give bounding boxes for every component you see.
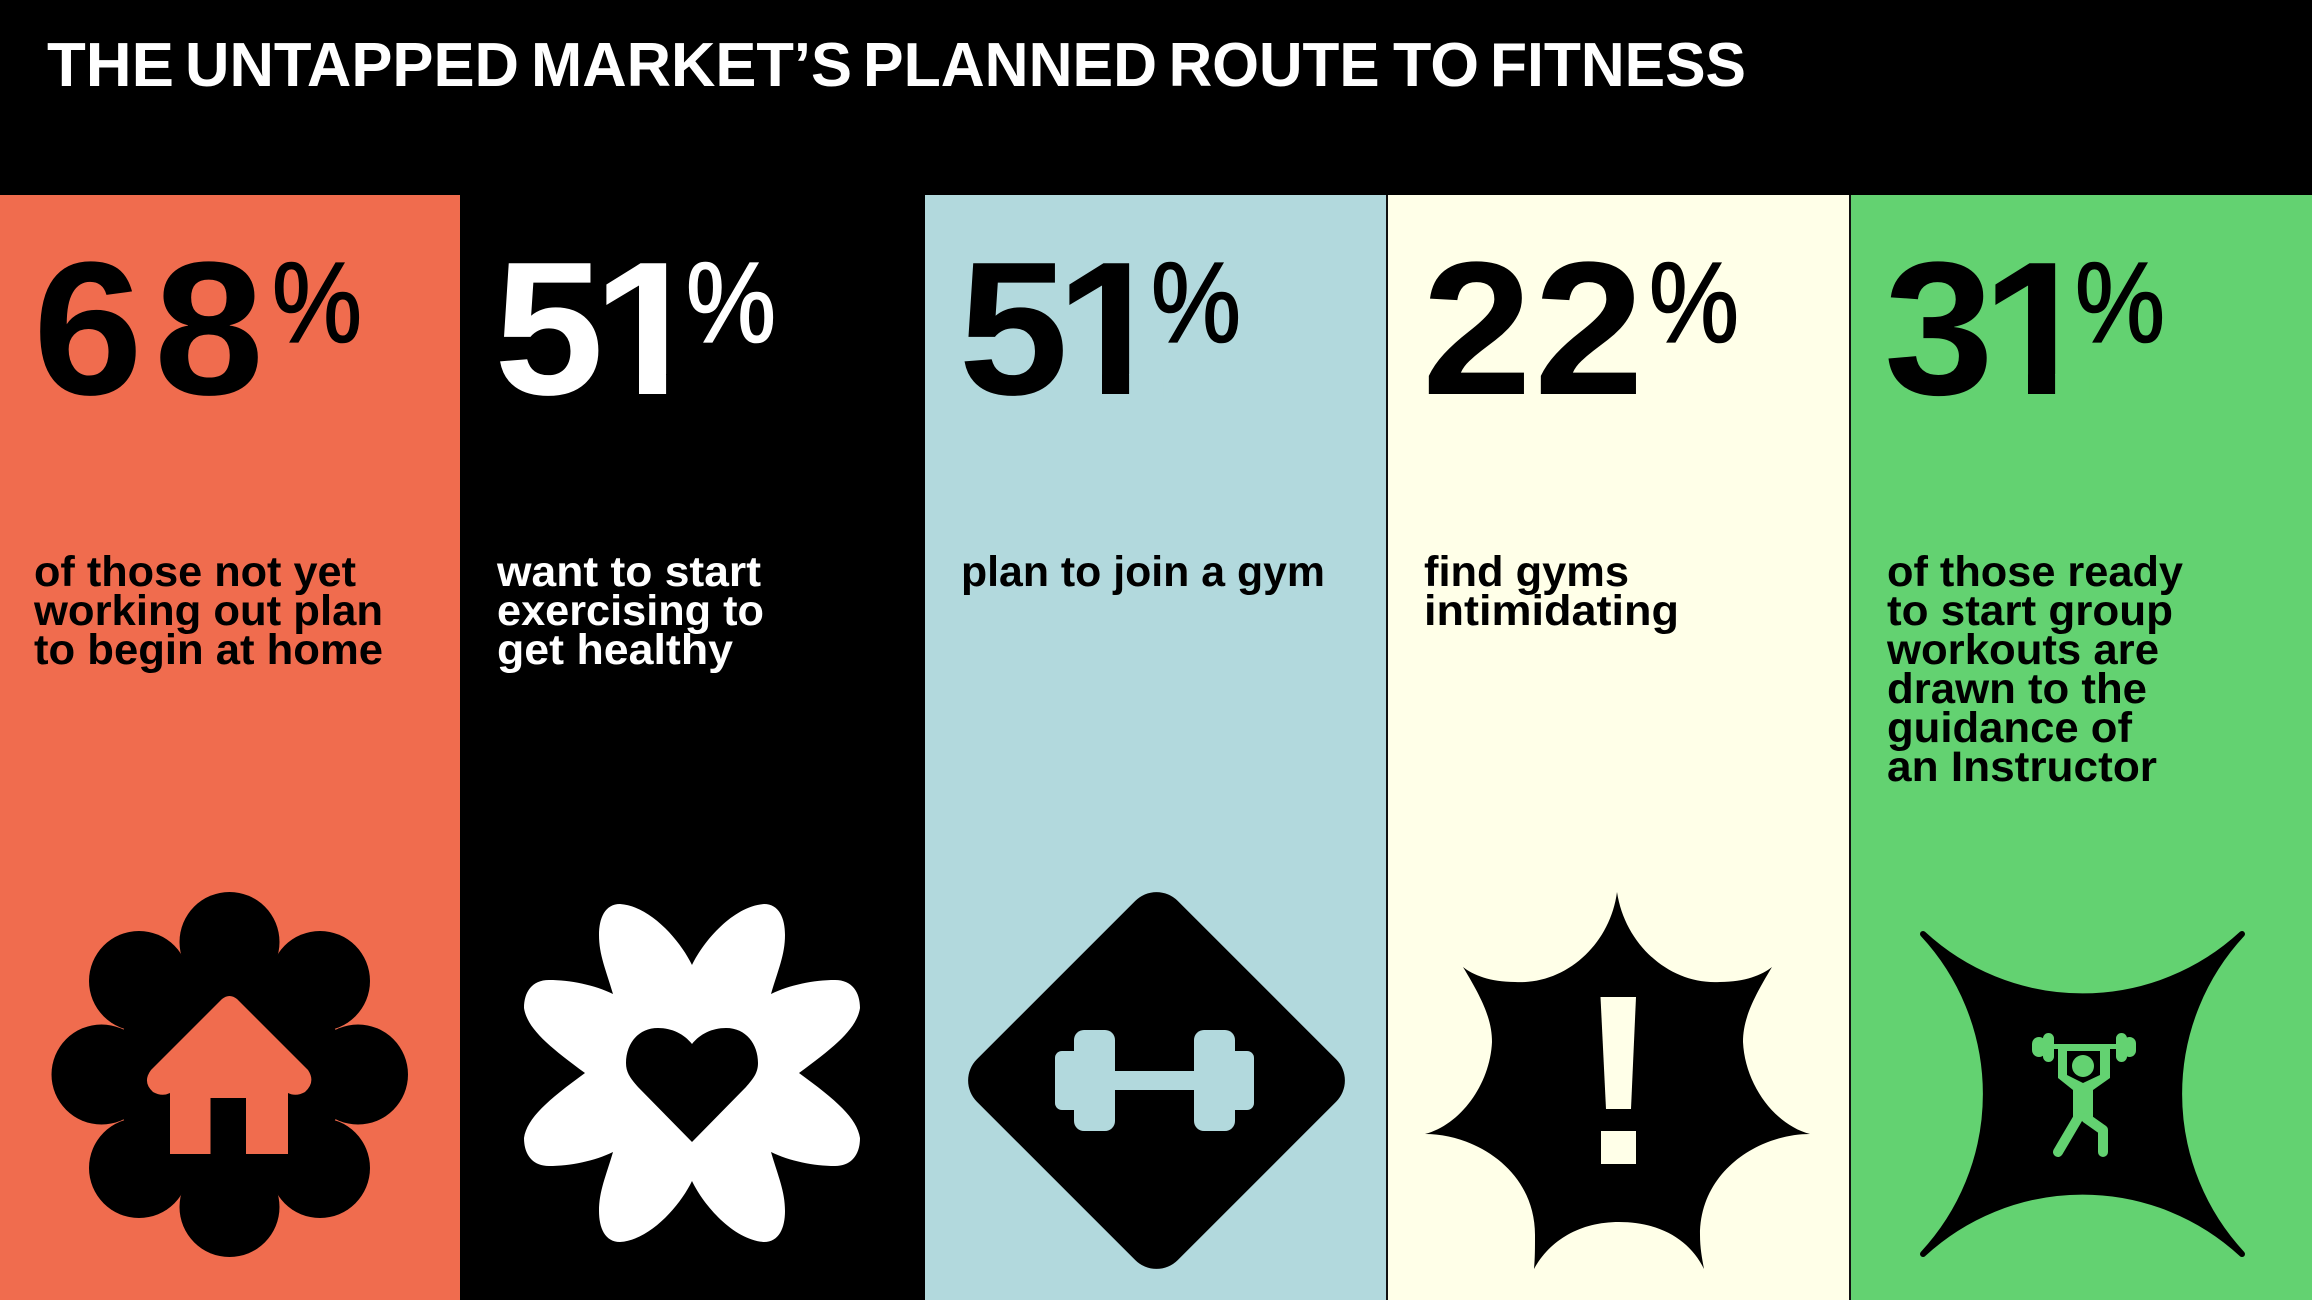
text: intimidating: [1424, 548, 1679, 635]
panel: 22% intimidating: [1386, 195, 1850, 1300]
title: FITNESS: [1490, 31, 1746, 100]
text: instructor: to start group: [1887, 587, 2173, 635]
icon: dumbbell in diamond: [956, 880, 1357, 1281]
panel: 68% begin at home: [0, 195, 460, 1300]
text: get healthy: [496, 548, 764, 674]
text: get healthy: get healthy: [497, 626, 733, 674]
stat: 51% white: 51: [494, 223, 703, 435]
title: TO: [1393, 31, 1479, 100]
text: instructor: [1886, 548, 2183, 791]
stat: 68%: 68: [33, 223, 264, 435]
text: instructor: guidance of: [1887, 704, 2133, 752]
panel: 31% instructor: [1849, 195, 2312, 1300]
text: instructor: of those ready: [1887, 548, 2183, 596]
title: PLANNED: [863, 31, 1157, 100]
stat: 51% white: %: [686, 240, 776, 367]
text: instructor: workouts are: [1886, 626, 2159, 674]
text: instructor: an Instructor: [1887, 743, 2157, 791]
stat: 22%: 22: [1422, 223, 1644, 435]
text: intimidating: intimidating: [1424, 587, 1679, 635]
text: begin at home: working out plan: [33, 587, 383, 635]
title: UNTAPPED: [185, 31, 519, 100]
text: begin at home: to begin at home: [34, 626, 383, 674]
icon: weightlifter in star: [1923, 934, 2242, 1254]
stat: 22%: %: [1649, 240, 1739, 367]
text: intimidating: find gyms: [1424, 548, 1629, 596]
icon: exclamation burst: [1425, 892, 1810, 1269]
title: MARKET’S: [531, 31, 852, 100]
stat: 31%: %: [2075, 240, 2165, 367]
stat: 51% black: %: [1151, 240, 1241, 367]
text: begin at home: [33, 548, 383, 674]
stat: 31%: 31: [1884, 223, 2092, 435]
text: join a gym: plan to join a gym: [961, 548, 1325, 596]
stat: 68%: %: [272, 240, 362, 367]
panel: 51% get healthy: [460, 195, 925, 1300]
icon: heart in petals: [524, 904, 860, 1242]
icon: house in flower: [52, 892, 408, 1257]
panel: 51% join a gym: [925, 195, 1387, 1300]
text: instructor: drawn to the: [1887, 665, 2147, 713]
text: get healthy: exercising to: [497, 587, 764, 635]
text: begin at home: of those not yet: [34, 548, 356, 596]
title: THE: [47, 31, 174, 100]
stat: 51% black: 51: [958, 223, 1166, 435]
title: [47, 31, 1746, 100]
title: ROUTE: [1169, 31, 1380, 100]
text: get healthy: want to start: [496, 548, 761, 596]
